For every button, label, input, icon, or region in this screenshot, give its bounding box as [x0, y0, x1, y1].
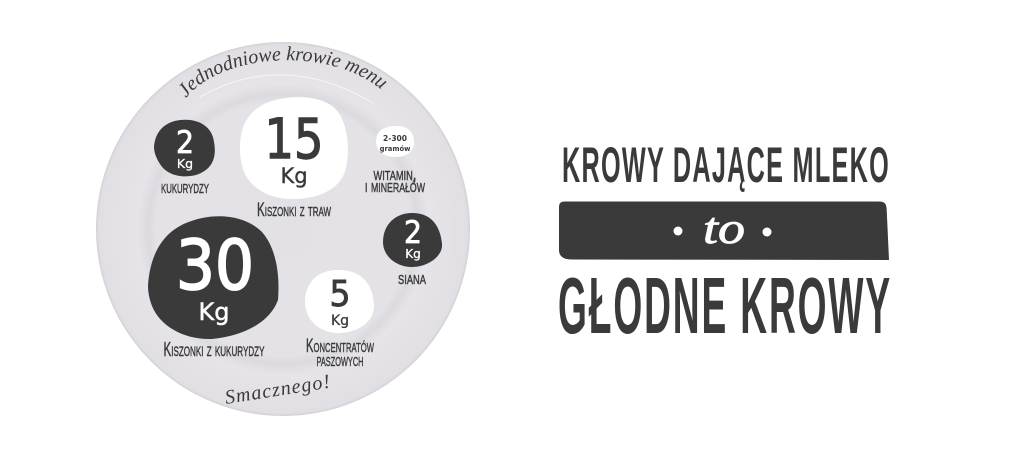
item: corn 2 kg: kukurydzy — [161, 177, 209, 198]
item: hay 2 kg: Kg — [405, 247, 421, 261]
item: corn 2 kg — [154, 120, 215, 198]
item: concentrates 5 kg: Koncentratów — [306, 336, 374, 357]
item: hay 2 kg: 2 — [404, 215, 422, 251]
item: corn silage 30 kg: Kiszonki z kukurydzy — [164, 339, 265, 361]
item: corn silage 30 kg: 30 — [176, 226, 254, 306]
item: vitamins and minerals — [365, 126, 425, 197]
item: corn 2 kg: 2 — [176, 125, 194, 161]
item: corn 2 kg: Kg — [177, 156, 193, 171]
item: vitamins and minerals: gramów — [380, 145, 411, 153]
item: grass silage 15 kg: Kg — [280, 164, 308, 188]
item: concentrates 5 kg: 5 — [330, 274, 350, 315]
item: vitamins and minerals: 2-300 — [383, 134, 407, 143]
item: concentrates 5 kg: Kg — [331, 313, 349, 329]
plate footer: Smacznego! — [223, 371, 331, 409]
banner — [559, 202, 889, 260]
item: vitamins and minerals: witamin, — [374, 164, 416, 185]
item: grass silage 15 kg: 15 — [264, 107, 324, 171]
item: hay 2 kg — [383, 213, 442, 289]
item: hay 2 kg: siana — [398, 268, 426, 289]
banner: to — [703, 204, 745, 253]
item: vitamins and minerals: i minerałów — [365, 176, 425, 197]
item: corn silage 30 kg — [148, 216, 278, 361]
item: concentrates 5 kg — [305, 270, 374, 371]
plate — [96, 42, 470, 416]
plate heading: Jednodniowe krowie menu — [180, 46, 386, 98]
item: concentrates 5 kg: paszowych — [316, 350, 364, 371]
item: grass silage 15 kg — [240, 97, 348, 221]
item: corn silage 30 kg: Kg — [199, 298, 229, 326]
item: grass silage 15 kg: Kiszonki z traw — [257, 200, 331, 221]
